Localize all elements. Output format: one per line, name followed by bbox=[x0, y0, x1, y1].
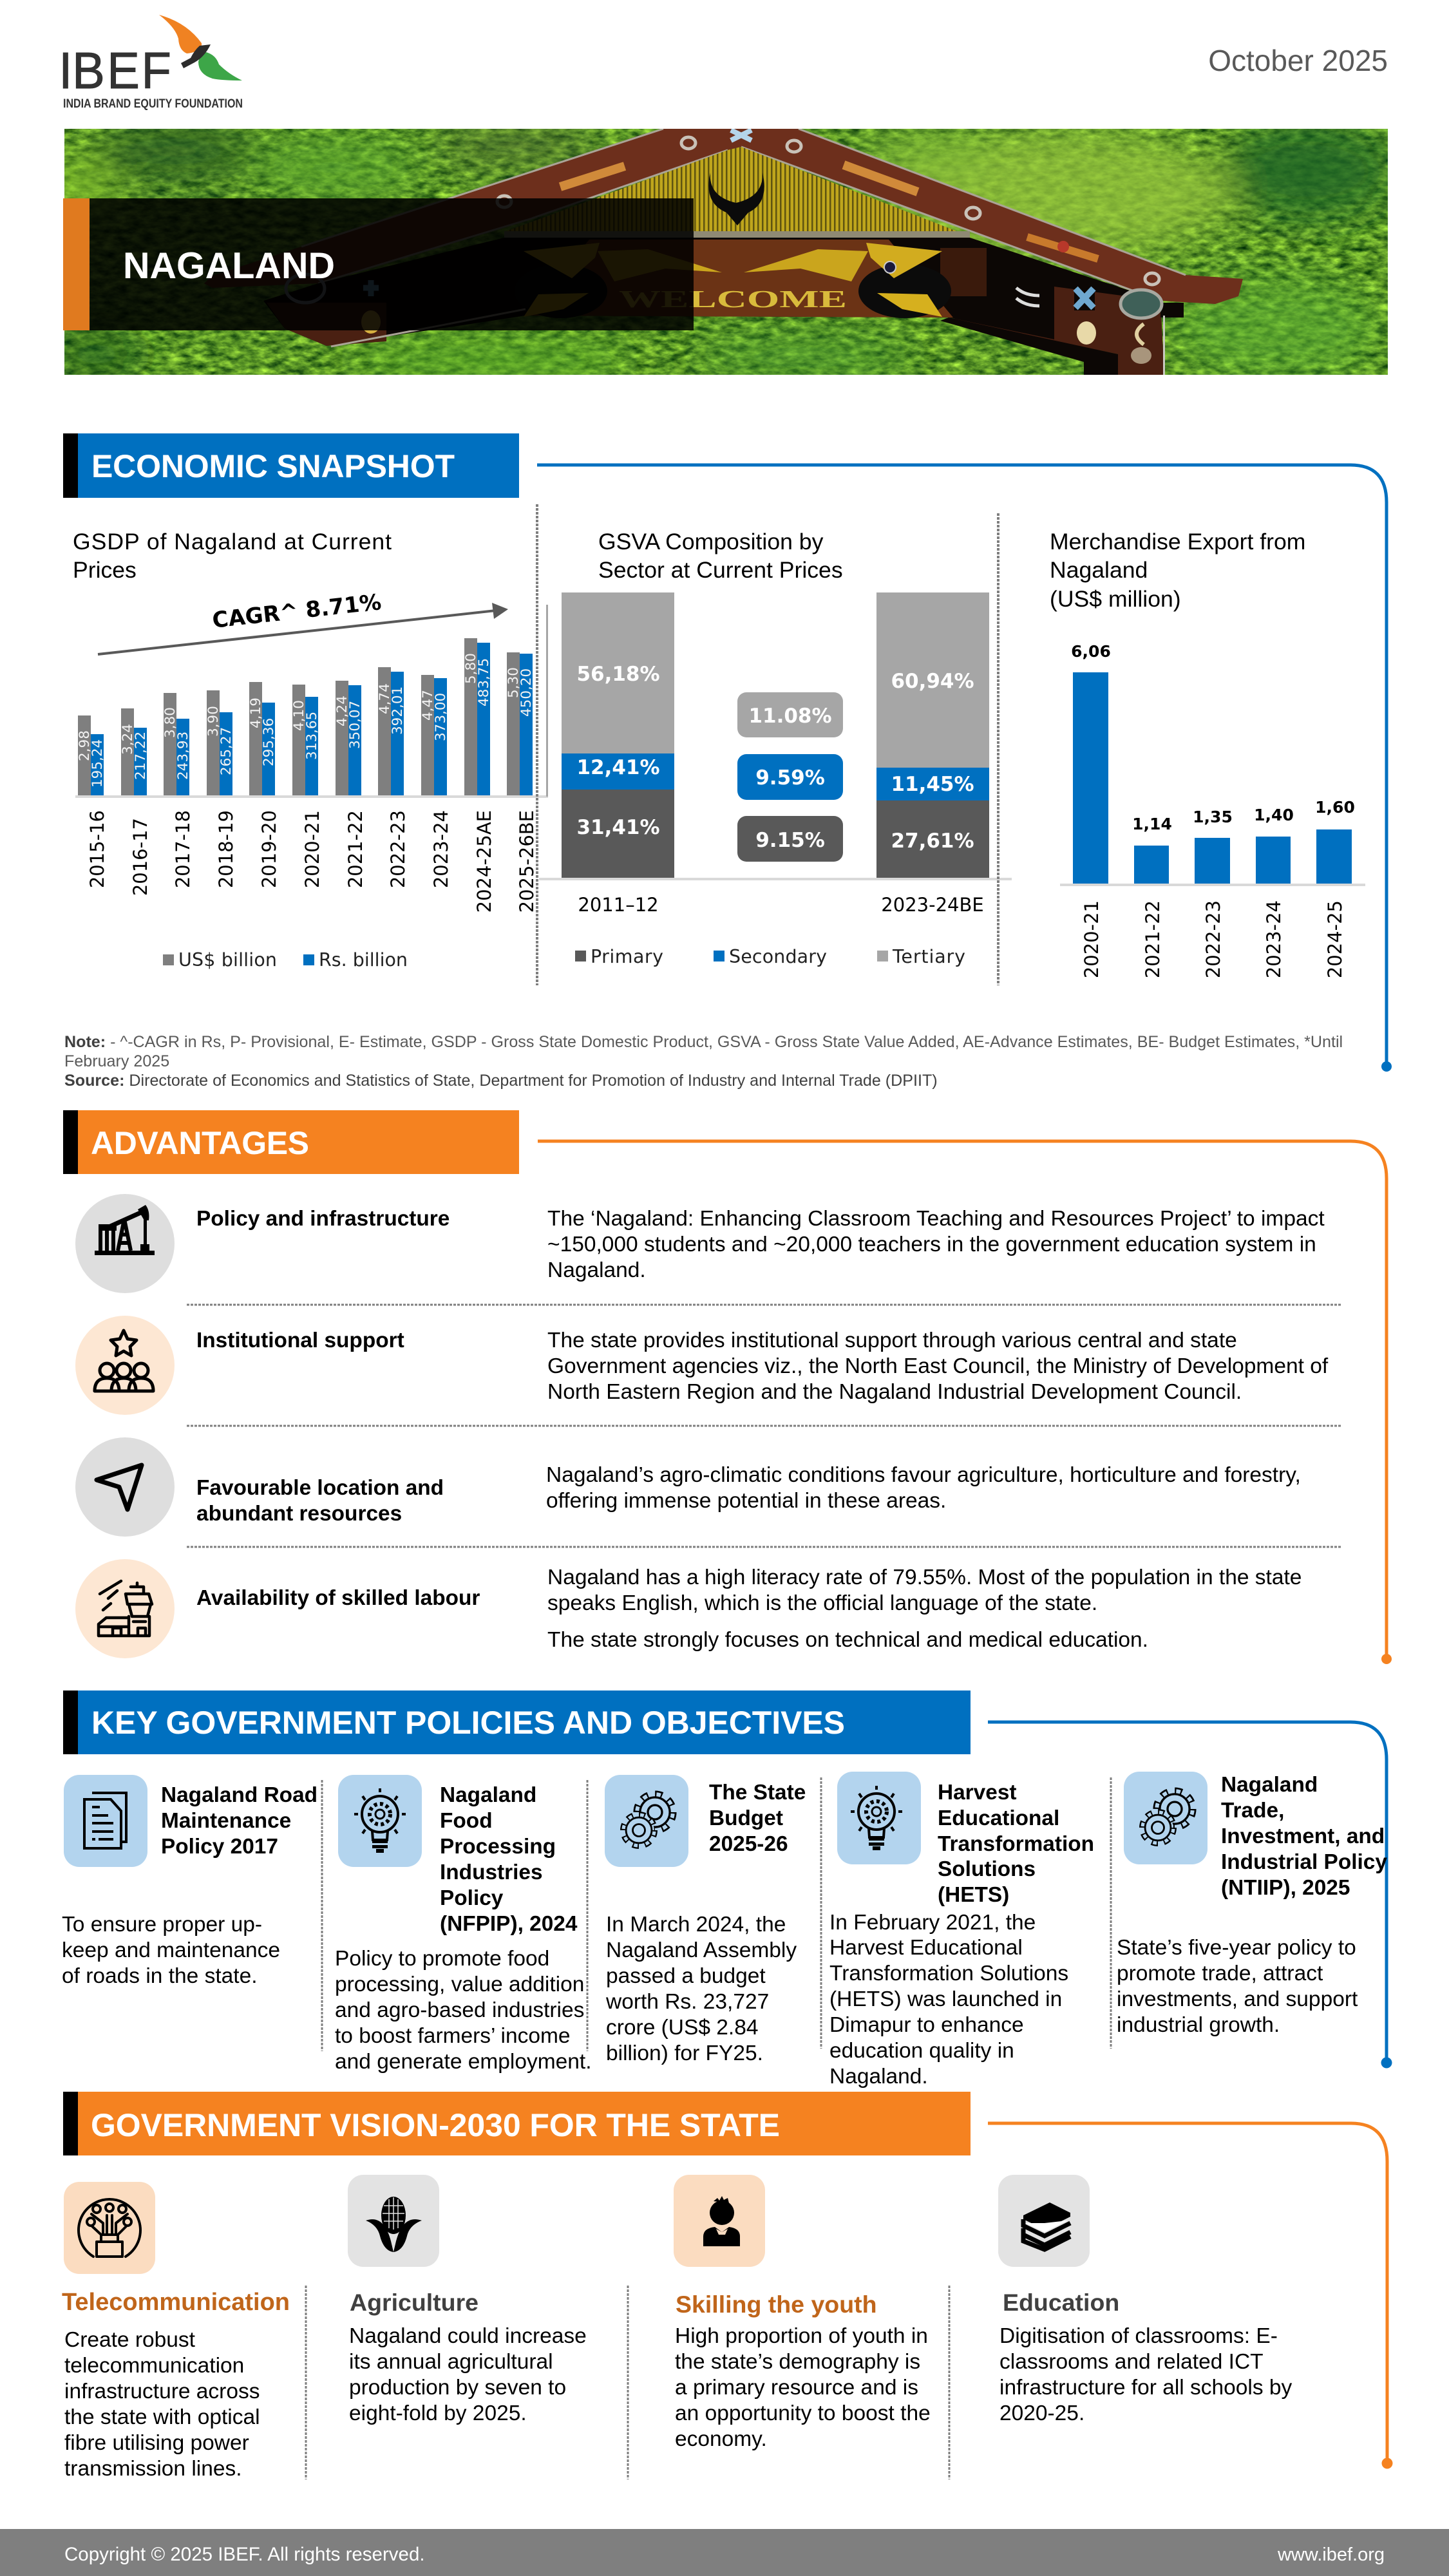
description: speaks English, which is the official language of the state. bbox=[547, 1591, 1097, 1615]
panel: GSDP chart bbox=[73, 529, 548, 971]
stacked bar 2011-12: 56,18% bbox=[576, 663, 660, 686]
vision column: agriculture bbox=[348, 2175, 587, 2425]
data labels: US$ billion: 2,98 bbox=[77, 730, 93, 761]
policy column: HETS: Nagaland. bbox=[829, 2065, 928, 2088]
panel: merchandise export chart: 1,40 bbox=[1254, 806, 1294, 824]
year axis labels: 2018-19 bbox=[215, 810, 237, 888]
policy column: HETS: Harvest Educational bbox=[829, 1936, 1023, 1960]
policy column: NTIIP: investments, and support bbox=[1117, 1987, 1358, 2011]
vision column: agriculture: Nagaland could increase bbox=[349, 2324, 587, 2348]
vision column: agriculture: its annual agricultural bbox=[349, 2350, 553, 2374]
data labels: US$ billion: 4,24 bbox=[334, 696, 350, 726]
policy column: food processing: Food bbox=[440, 1809, 493, 1833]
year axis labels: 2022-23 bbox=[387, 810, 409, 888]
policy column: food processing: Nagaland bbox=[440, 1783, 536, 1807]
data labels: Rs. billion: 483,75 bbox=[476, 658, 492, 706]
description bbox=[547, 1329, 1329, 1404]
panel: GSVA composition chart: Sector at Current Prices bbox=[598, 557, 843, 583]
icon: young person bbox=[674, 2175, 765, 2267]
section header: government vision bbox=[63, 2092, 971, 2155]
description: Nagaland has a high literacy rate of 79.55%. Most of the population in the state bbox=[547, 1566, 1302, 1589]
policy column: NTIIP bbox=[1117, 1772, 1387, 2037]
data labels: US$ billion: 3,24 bbox=[120, 724, 136, 755]
CAGR arrow bbox=[98, 589, 508, 654]
vision column: skilling the youth: Skilling the youth bbox=[676, 2291, 877, 2318]
vision column: telecommunication: Telecommunication bbox=[62, 2289, 290, 2316]
panel: GSVA composition chart: GSVA Composition by bbox=[598, 529, 824, 554]
policy column: food processing: Processing bbox=[440, 1835, 556, 1859]
policy column: state budget: In March 2024, the bbox=[606, 1913, 786, 1937]
date: October 2025 bbox=[1208, 44, 1388, 77]
policy column: NTIIP: Nagaland bbox=[1221, 1773, 1318, 1797]
vision column: skilling the youth: economy. bbox=[675, 2427, 767, 2451]
vision column: skilling the youth: the state’s demography is bbox=[675, 2350, 920, 2374]
data labels: US$ billion: 4,47 bbox=[420, 690, 436, 721]
connector: vision bbox=[988, 2123, 1392, 2469]
policy column: NTIIP: Investment, and bbox=[1221, 1824, 1385, 1848]
policy column: state budget: crore (US$ 2.84 bbox=[606, 2016, 758, 2040]
vision column: education: Digitisation of classrooms: E- bbox=[999, 2324, 1278, 2348]
year axis labels bbox=[86, 810, 538, 913]
policy column: HETS: Transformation Solutions bbox=[829, 1962, 1068, 1985]
panel: merchandise export chart: Merchandise Export from bbox=[1050, 529, 1305, 554]
stacked bar 2023-24BE bbox=[876, 592, 989, 878]
description: Government agencies viz., the North East Council, the Ministry of Development of bbox=[547, 1354, 1329, 1378]
panel: merchandise export chart: 2022-23 bbox=[1202, 900, 1224, 978]
data labels: Rs. billion: 313,65 bbox=[304, 712, 320, 760]
note and source: Note: - ^-CAGR in Rs, P- Provisional, E- Estimate, GSDP - Gross State Domestic Product, GSVA - Gross State Value Added, AE-Advance Estimates, BE- Budget Estimates, *Until bbox=[64, 1033, 1343, 1051]
panel: merchandise export chart: 2020-21 bbox=[1081, 900, 1103, 978]
panel: GSDP chart: GSDP of Nagaland at Current bbox=[73, 529, 392, 554]
panel: merchandise export chart: 2023-24 bbox=[1263, 900, 1285, 978]
legend: US$ billion bbox=[178, 949, 277, 971]
panel: GSVA composition chart: 2023-24BE bbox=[881, 894, 984, 916]
advantage row: institutional support: Institutional support bbox=[196, 1329, 404, 1352]
panel: GSVA composition chart: 2011–12 bbox=[578, 894, 659, 916]
policy column: road maintenance: Nagaland Road bbox=[161, 1783, 317, 1807]
vision column: skilling the youth: an opportunity to boost the bbox=[675, 2401, 931, 2425]
year axis labels: 2023-24 bbox=[430, 810, 452, 888]
hero image: Nagaland welcome gate: WELCOME bbox=[619, 286, 847, 313]
icon: bulb with gear bbox=[338, 1775, 422, 1867]
vision column: telecommunication: the state with optical bbox=[64, 2405, 260, 2429]
description: The state provides institutional support through various central and state bbox=[547, 1329, 1237, 1352]
advantage row: policy and infrastructure: Policy and infrastructure bbox=[196, 1207, 450, 1231]
section header: key government policies: KEY GOVERNMENT POLICIES AND OBJECTIVES bbox=[91, 1705, 845, 1741]
stacked bar 2011-12: 12,41% bbox=[576, 756, 660, 779]
policy column: HETS: (HETS) bbox=[938, 1883, 1009, 1907]
policy column: HETS: education quality in bbox=[829, 2039, 1014, 2063]
logo: IBEF: IBEF bbox=[59, 41, 171, 99]
vision column: agriculture: eight-fold by 2025. bbox=[349, 2401, 527, 2425]
legend bbox=[575, 946, 965, 967]
panel: merchandise export chart: (US$ million) bbox=[1050, 586, 1181, 612]
panel: merchandise export chart: 6,06 bbox=[1071, 642, 1111, 661]
description: Nagaland. bbox=[547, 1258, 646, 1282]
vision column: education: 2020-25. bbox=[999, 2401, 1084, 2425]
year axis labels: 2019-20 bbox=[258, 810, 280, 888]
year axis labels: 2025-26BE bbox=[516, 810, 538, 913]
icon: airport tower bbox=[75, 1559, 175, 1658]
stacked bar 2023-24BE: 11,45% bbox=[891, 773, 974, 796]
CAGR badges: 9.15% bbox=[755, 829, 825, 852]
data labels: US$ billion: 5,30 bbox=[506, 667, 522, 698]
year axis labels: 2016-17 bbox=[129, 818, 151, 896]
data labels: Rs. billion: 217,22 bbox=[133, 732, 149, 780]
policy column: NTIIP: promote trade, attract bbox=[1117, 1962, 1323, 1985]
connector: advantages bbox=[538, 1141, 1392, 1664]
data labels: US$ billion: 5,80 bbox=[463, 653, 479, 684]
data labels: US$ billion: 4,10 bbox=[291, 700, 307, 731]
year axis labels: 2017-18 bbox=[172, 810, 194, 888]
year axis labels: 2021-22 bbox=[345, 810, 366, 888]
data labels: US$ billion bbox=[77, 653, 522, 761]
policy column: road maintenance bbox=[62, 1775, 317, 1988]
connector: economic snapshot bbox=[537, 465, 1392, 1072]
stacked bar 2023-24BE: 60,94% bbox=[891, 670, 974, 693]
policy column: food processing: Industries bbox=[440, 1861, 543, 1884]
data labels: US$ billion: 4,19 bbox=[248, 697, 264, 728]
connector: policies bbox=[988, 1722, 1392, 2069]
panel: GSVA composition chart bbox=[539, 529, 1012, 967]
policy column: HETS: Harvest bbox=[938, 1781, 1017, 1804]
policy column: state budget: Budget bbox=[709, 1806, 783, 1830]
icon: people and star bbox=[75, 1316, 175, 1415]
policy column: road maintenance: Policy 2017 bbox=[161, 1835, 278, 1859]
vision column: skilling the youth: High proportion of youth in bbox=[675, 2324, 928, 2348]
policy column: road maintenance: keep and maintenance bbox=[62, 1938, 280, 1962]
legend: Primary bbox=[591, 946, 663, 967]
section header: key government policies bbox=[63, 1690, 971, 1754]
description: North Eastern Region and the Nagaland Industrial Development Council. bbox=[547, 1380, 1242, 1404]
data labels: Rs. billion: 243,93 bbox=[175, 732, 191, 780]
policy column: food processing: Policy bbox=[440, 1886, 504, 1910]
data labels: Rs. billion: 265,27 bbox=[218, 727, 234, 775]
policy column: HETS: Solutions bbox=[938, 1857, 1036, 1881]
policy column: food processing: Policy to promote food bbox=[335, 1947, 549, 1971]
panel: GSDP chart: Prices bbox=[73, 557, 137, 583]
data labels: Rs. billion: 373,00 bbox=[433, 693, 449, 741]
CAGR arrow: CAGR^ 8.71% bbox=[211, 589, 383, 634]
policy column: HETS: Dimapur to enhance bbox=[829, 2013, 1024, 2037]
policy column: NTIIP: industrial growth. bbox=[1117, 2013, 1280, 2037]
section header: advantages bbox=[63, 1110, 519, 1174]
policy column: state budget: billion) for FY25. bbox=[606, 2041, 763, 2065]
data labels: Rs. billion: 392,01 bbox=[390, 687, 406, 735]
footer: Copyright © 2025 IBEF. All rights reserved. bbox=[64, 2544, 425, 2565]
legend: Rs. billion bbox=[319, 949, 408, 971]
vision column: skilling the youth: a primary resource and is bbox=[675, 2376, 918, 2400]
legend: Secondary bbox=[729, 946, 827, 967]
year axis labels: 2020-21 bbox=[301, 810, 323, 888]
bars: US$ billion bbox=[78, 638, 520, 796]
panel: merchandise export chart: 2021-22 bbox=[1142, 900, 1164, 978]
hero title band bbox=[63, 198, 694, 330]
policy column: HETS: Transformation bbox=[938, 1832, 1094, 1856]
policy column: road maintenance: of roads in the state. bbox=[62, 1964, 258, 1988]
section header: economic snapshot: ECONOMIC SNAPSHOT bbox=[91, 448, 455, 484]
policy column: state budget: worth Rs. 23,727 bbox=[605, 1990, 769, 2014]
policy column: food processing bbox=[335, 1775, 592, 2074]
stacked bar 2023-24BE: 27,61% bbox=[891, 829, 974, 853]
policy column: NTIIP: (NTIIP), 2025 bbox=[1221, 1876, 1350, 1900]
data labels: US$ billion: 4,74 bbox=[377, 683, 393, 714]
description bbox=[547, 1566, 1302, 1652]
policy column: state budget: 2025-26 bbox=[709, 1832, 788, 1856]
stacked bar 2011-12: 31,41% bbox=[576, 816, 660, 839]
panel: merchandise export chart: 1,35 bbox=[1193, 808, 1233, 826]
policy column: HETS bbox=[829, 1772, 1094, 2088]
data labels: Rs. billion: 450,20 bbox=[518, 668, 535, 717]
icon: gears bbox=[605, 1775, 688, 1867]
policy column: food processing: and agro-based industries bbox=[335, 1998, 584, 2022]
icon: bulb with gear bbox=[837, 1772, 921, 1864]
panel: merchandise export chart: Nagaland bbox=[1050, 557, 1148, 583]
vision column: education bbox=[998, 2175, 1293, 2425]
panel: merchandise export chart bbox=[1050, 529, 1365, 978]
policy column: state budget: Nagaland Assembly bbox=[606, 1938, 797, 1962]
icon: gears bbox=[1124, 1772, 1208, 1864]
data labels: Rs. billion bbox=[90, 658, 535, 788]
policy column: food processing: processing, value addition bbox=[335, 1973, 584, 1996]
CAGR badges: 9.59% bbox=[755, 766, 825, 790]
section header: advantages: ADVANTAGES bbox=[91, 1125, 309, 1161]
vision column: telecommunication: Create robust bbox=[64, 2328, 196, 2352]
policy column: NTIIP: Industrial Policy bbox=[1221, 1850, 1387, 1874]
section header: economic snapshot bbox=[63, 433, 519, 498]
policy column: road maintenance: Maintenance bbox=[161, 1809, 291, 1833]
policy column: HETS: (HETS) was launched in bbox=[829, 1987, 1062, 2011]
logo: IBEF: INDIA BRAND EQUITY FOUNDATION bbox=[63, 97, 243, 111]
CAGR badges bbox=[737, 692, 843, 862]
icon: books bbox=[998, 2175, 1090, 2267]
footer: www.ibef.org bbox=[1277, 2544, 1385, 2565]
data labels: Rs. billion: 195,24 bbox=[90, 739, 106, 788]
vision column: telecommunication: telecommunication bbox=[64, 2354, 244, 2378]
icon: documents bbox=[64, 1775, 147, 1867]
policy column: road maintenance: To ensure proper up- bbox=[62, 1913, 262, 1937]
description: The ‘Nagaland: Enhancing Classroom Teaching and Resources Project’ to impact bbox=[547, 1207, 1325, 1231]
icon: corn bbox=[348, 2175, 439, 2267]
footer bbox=[0, 2529, 1449, 2576]
CAGR badges: 11.08% bbox=[748, 705, 832, 728]
stacked bar 2011-12 bbox=[562, 592, 674, 878]
description: ~150,000 students and ~20,000 teachers in the government education system in bbox=[547, 1233, 1316, 1256]
data labels: US$ billion: 3,80 bbox=[162, 707, 178, 738]
bars: Rs. billion bbox=[91, 643, 533, 796]
panel: merchandise export chart: 2024-25 bbox=[1324, 900, 1346, 978]
legend bbox=[163, 949, 408, 971]
year axis labels: 2015-16 bbox=[86, 810, 108, 888]
icon: oil pump bbox=[75, 1194, 175, 1293]
data labels: Rs. billion: 295,36 bbox=[261, 718, 277, 766]
advantage row: favourable location bbox=[75, 1437, 1301, 1537]
description bbox=[547, 1207, 1325, 1282]
vision column: telecommunication bbox=[62, 2182, 290, 2481]
description: offering immense potential in these areas. bbox=[546, 1489, 946, 1513]
logo: IBEF bbox=[59, 15, 243, 111]
description bbox=[546, 1463, 1301, 1513]
description: The state strongly focuses on technical and medical education. bbox=[547, 1628, 1148, 1652]
advantage row: skilled labour bbox=[75, 1559, 1302, 1658]
vision column: skilling the youth bbox=[674, 2175, 931, 2451]
right and left hornbills bbox=[744, 243, 951, 318]
hero image: Nagaland welcome gate bbox=[48, 119, 1391, 383]
vision column: education: Education bbox=[1003, 2289, 1119, 2316]
advantage row: policy and infrastructure bbox=[75, 1194, 1325, 1293]
advantage row: favourable location: Favourable location and bbox=[196, 1476, 444, 1500]
data labels: US$ billion: 3,90 bbox=[205, 706, 222, 737]
policy column: food processing: (NFPIP), 2024 bbox=[440, 1912, 578, 1936]
description: Nagaland’s agro-climatic conditions favour agriculture, horticulture and forestry, bbox=[546, 1463, 1301, 1487]
note and source: February 2025 bbox=[64, 1052, 169, 1070]
advantage row: skilled labour: Availability of skilled labour bbox=[196, 1586, 480, 1610]
vision column: agriculture: production by seven to bbox=[349, 2376, 566, 2400]
policy column: state budget: The State bbox=[709, 1781, 806, 1804]
policy column: state budget: passed a budget bbox=[606, 1964, 766, 1988]
advantage row: favourable location: abundant resources bbox=[196, 1502, 402, 1526]
year axis labels: 2024-25AE bbox=[473, 810, 495, 913]
vision column: telecommunication: fibre utilising power bbox=[64, 2431, 249, 2455]
section header: government vision: GOVERNMENT VISION-2030 FOR THE STATE bbox=[91, 2107, 780, 2143]
vision column: telecommunication: transmission lines. bbox=[64, 2457, 242, 2481]
legend: Tertiary bbox=[892, 946, 965, 967]
panel: merchandise export chart: 1,60 bbox=[1315, 798, 1355, 817]
policy column: state budget bbox=[605, 1775, 806, 2065]
vision column: agriculture: Agriculture bbox=[350, 2289, 478, 2316]
policy column: HETS: Educational bbox=[938, 1806, 1059, 1830]
policy column: NTIIP: Trade, bbox=[1221, 1799, 1284, 1823]
policy column: food processing: and generate employment. bbox=[335, 2050, 592, 2074]
panel: merchandise export chart: 1,14 bbox=[1132, 815, 1172, 833]
note and source: Source: Directorate of Economics and Statistics of State, Department for Promotion of Industry and Internal Trade (DPIIT) bbox=[64, 1072, 938, 1090]
vision column: education: classrooms and related ICT bbox=[999, 2350, 1264, 2374]
note and source bbox=[64, 1033, 1343, 1090]
vision column: education: infrastructure for all schools by bbox=[999, 2376, 1293, 2400]
hero title band: NAGALAND bbox=[123, 245, 335, 287]
data labels: Rs. billion: 350,07 bbox=[347, 701, 363, 749]
policy column: HETS: In February 2021, the bbox=[829, 1911, 1036, 1935]
icon: navigation arrow bbox=[75, 1437, 175, 1537]
policy column: NTIIP: State’s five-year policy to bbox=[1117, 1936, 1356, 1960]
vision column: telecommunication: infrastructure across bbox=[64, 2380, 260, 2403]
policy column: food processing: to boost farmers’ income bbox=[335, 2024, 571, 2048]
advantage row: institutional support bbox=[75, 1316, 1329, 1415]
icon: fibre optics bbox=[64, 2182, 155, 2274]
